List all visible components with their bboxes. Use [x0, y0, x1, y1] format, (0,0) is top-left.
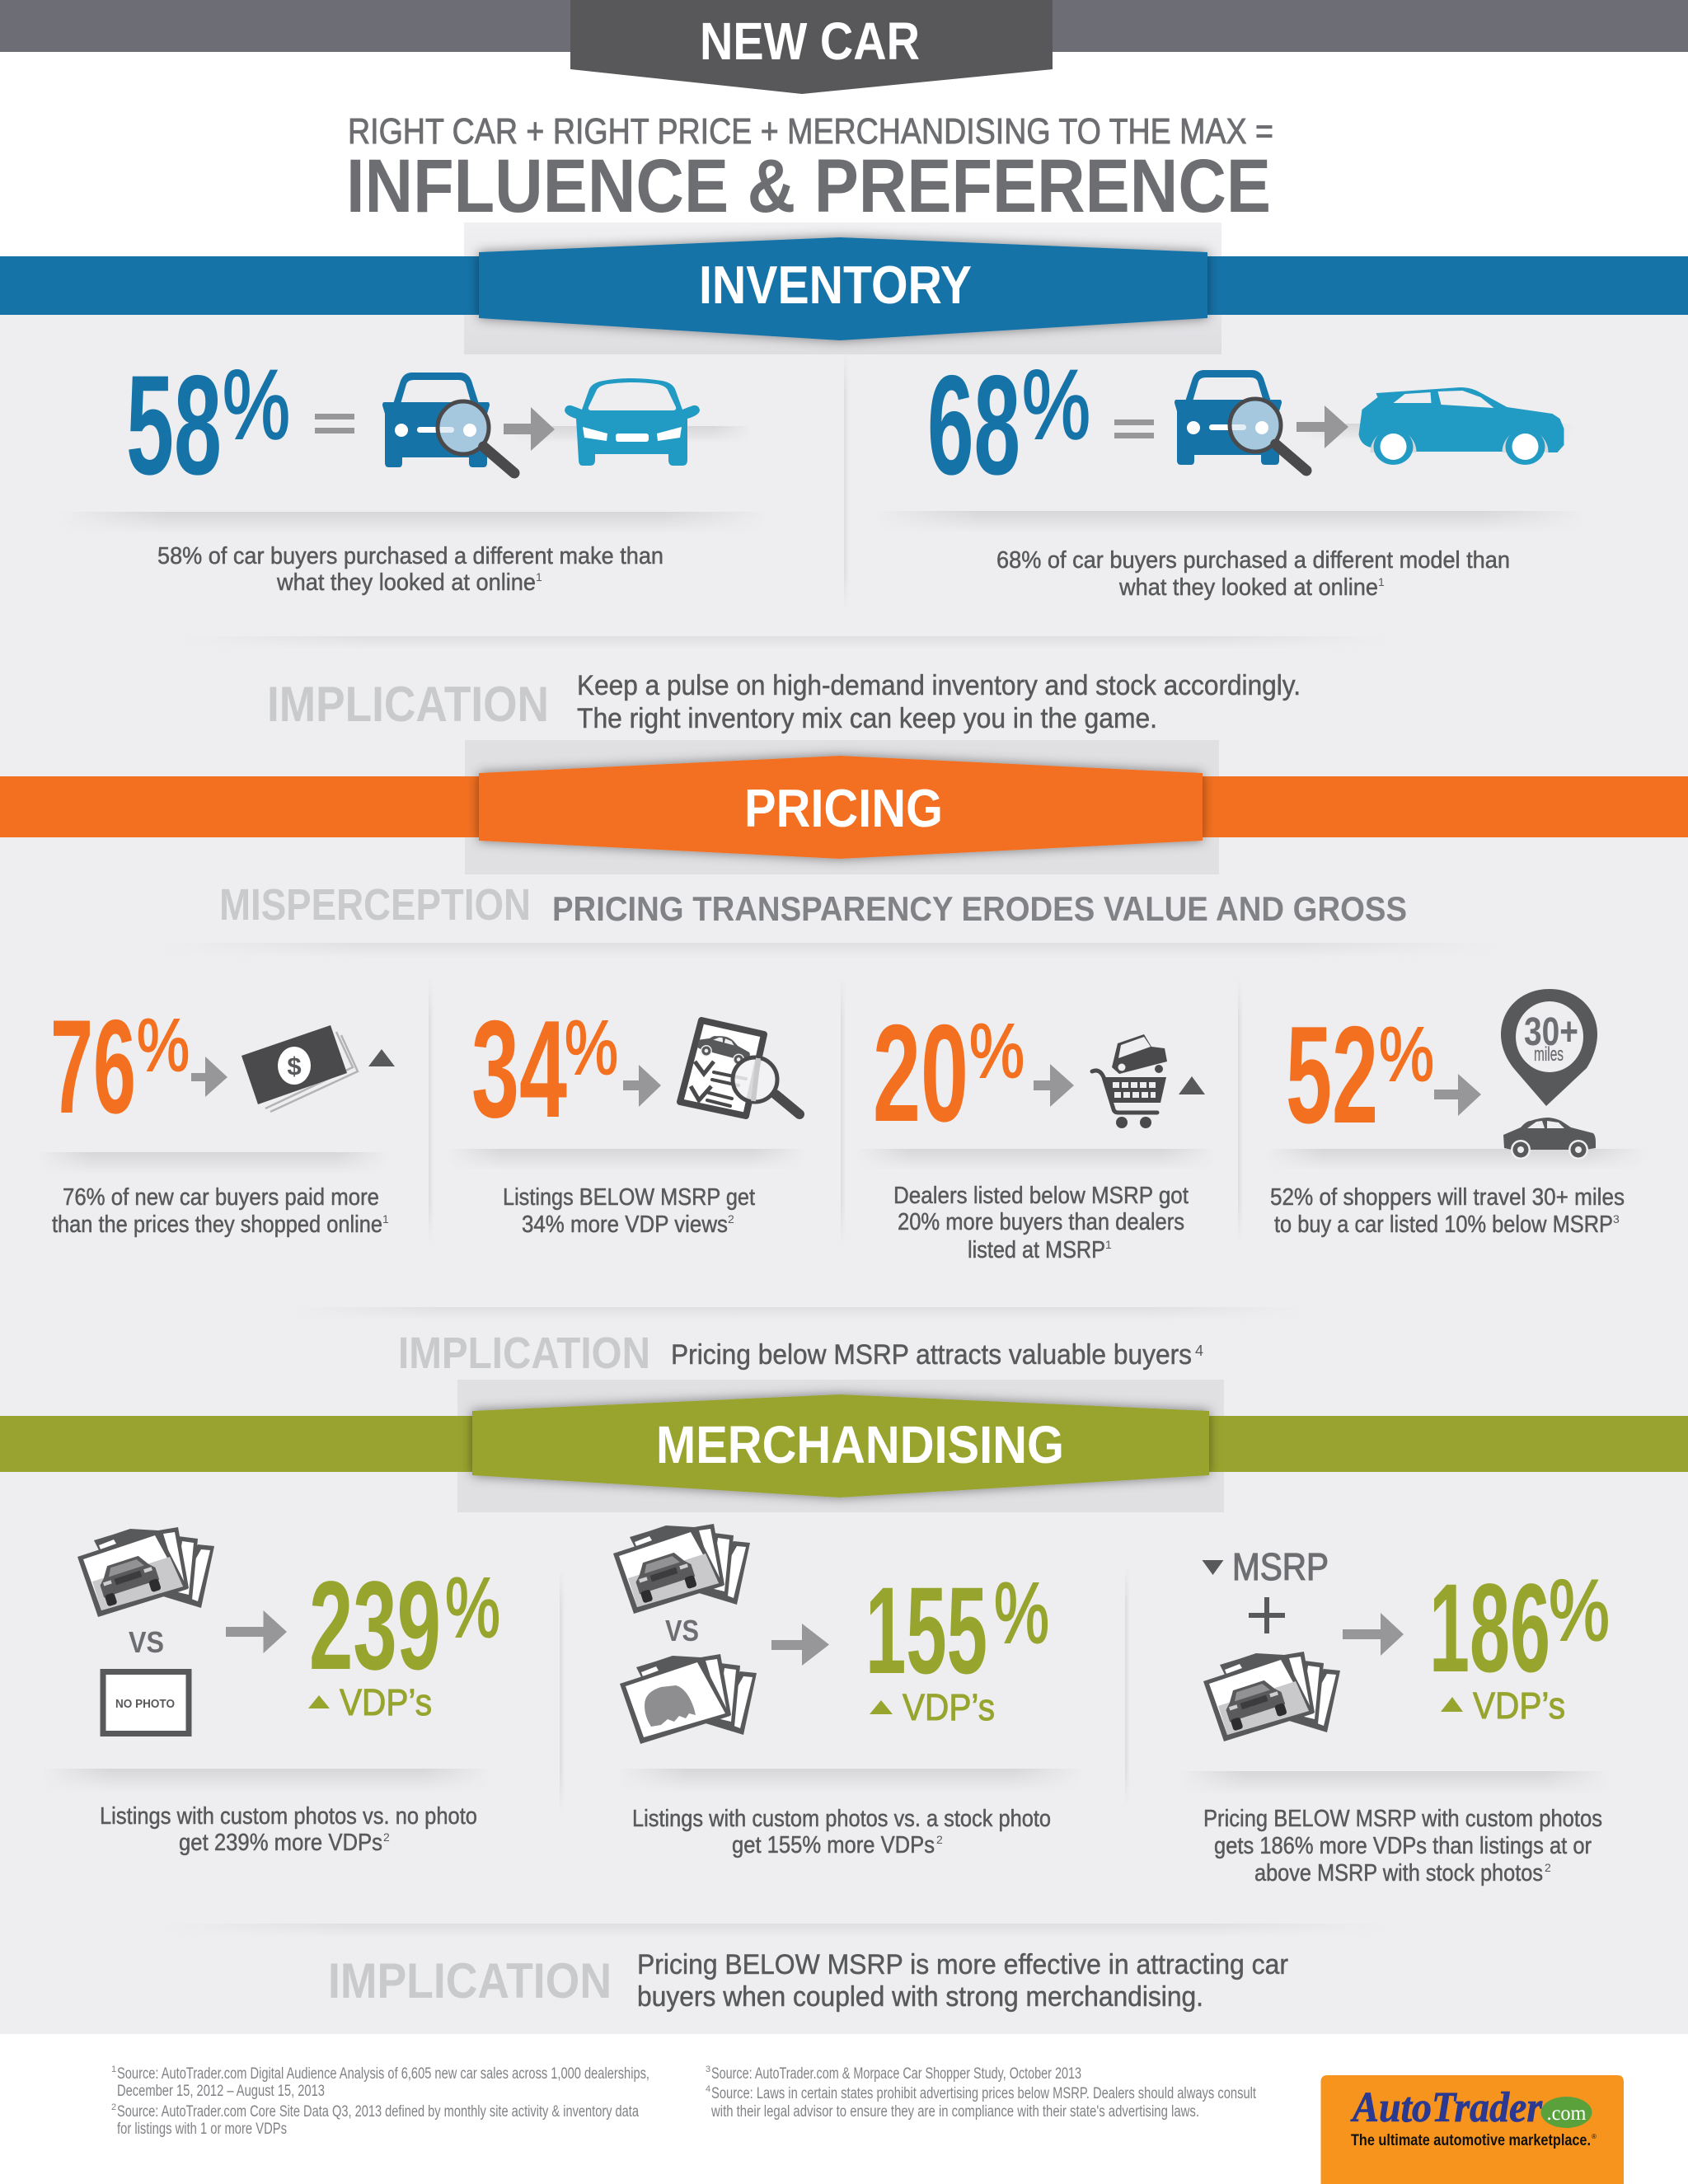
caption: 68 percent: 68% of car buyers purchased a different model than	[996, 547, 1510, 574]
pricing band	[0, 740, 1688, 874]
caption: 52 percent: to buy a car listed 10% below MSRP	[1274, 1212, 1613, 1238]
caption: 52 percent: 3	[1613, 1212, 1620, 1226]
caption: 34 percent: Listings BELOW MSRP get	[503, 1184, 755, 1211]
caption: 155 percent: Listings with custom photos vs. a stock photo	[632, 1806, 1051, 1832]
stat: 76 percent: %	[137, 1005, 190, 1087]
inventory heading: INVENTORY	[699, 255, 972, 315]
stat: 68 percent: 68	[927, 346, 1020, 504]
panel: merchandising	[0, 1380, 1688, 2013]
icon: shopping cart with car	[1092, 1034, 1205, 1128]
implication: inventory	[267, 670, 1301, 734]
stat: 76 percent: 76	[50, 992, 136, 1141]
implication: merchandising: Pricing BELOW MSRP is more effective in attracting car	[637, 1949, 1288, 1980]
caption: 155 percent: 2	[936, 1833, 943, 1846]
caption: 186 percent: 2	[1545, 1861, 1551, 1874]
arrow	[504, 407, 555, 451]
caption: 239 percent: get 239% more VDPs	[179, 1830, 382, 1856]
plus sign	[1249, 1597, 1285, 1633]
icon: checklist with magnifier	[680, 1020, 799, 1116]
caption: 20 percent	[893, 1183, 1189, 1263]
stat: 186 percent: %	[1549, 1563, 1610, 1659]
caption: 20 percent: 1	[1105, 1238, 1112, 1251]
footnotes: right: Source: AutoTrader.com & Morpace Car Shopper Study, October 2013	[711, 2065, 1081, 2083]
arrow	[1034, 1064, 1074, 1107]
caption: 34 percent: 34% more VDP views	[522, 1212, 728, 1238]
vs label: VS	[665, 1614, 699, 1647]
implication: inventory: Keep a pulse on high-demand inventory and stock accordingly.	[577, 670, 1301, 701]
stat: 20 percent: %	[969, 1008, 1025, 1094]
implication: merchandising: IMPLICATION	[328, 1953, 612, 2008]
stat: 58 percent: 58	[126, 346, 222, 504]
implication: pricing: Pricing below MSRP attracts valuable buyers	[671, 1339, 1192, 1371]
logo: autotrader: AutoTrader	[1350, 2084, 1543, 2131]
caption: 239 percent: Listings with custom photos vs. no photo	[100, 1803, 477, 1830]
arrow	[1296, 405, 1348, 448]
caption: 76 percent: than the prices they shopped online	[52, 1212, 382, 1238]
badge: new car	[570, 0, 1053, 94]
icon: equals	[315, 414, 354, 434]
caption: 52 percent: 52% of shoppers will travel 30+ miles	[1270, 1184, 1625, 1211]
logo: autotrader: The ultimate automotive marketplace.	[1351, 2132, 1591, 2149]
arrow	[623, 1065, 661, 1107]
caption: 155 percent	[632, 1806, 1051, 1858]
caption: 186 percent: Pricing BELOW MSRP with custom photos	[1203, 1806, 1602, 1832]
stat: 68 percent: %	[1022, 350, 1090, 460]
icon: small car	[1503, 1118, 1596, 1160]
caption: 20 percent: 20% more buyers than dealers	[898, 1209, 1184, 1235]
stat: 239 percent: %	[445, 1560, 500, 1655]
misperception line	[219, 880, 1407, 930]
stat: 52 percent: 52	[1286, 997, 1378, 1152]
implication: merchandising: buyers when coupled with strong merchandising.	[637, 1981, 1203, 2013]
label: below msrp: MSRP	[1232, 1545, 1329, 1588]
icon: different model suv	[1358, 387, 1564, 465]
arrow	[226, 1610, 287, 1653]
caption: 52 percent	[1270, 1184, 1625, 1238]
caption: 186 percent	[1203, 1806, 1602, 1886]
caption: 239 percent	[100, 1803, 477, 1856]
caption: 186 percent: above MSRP with stock photos	[1254, 1860, 1543, 1886]
footnotes: right: 4	[706, 2084, 710, 2094]
label: up triangle vdps: VDP’s	[340, 1681, 432, 1723]
caption: 58 percent	[157, 543, 663, 596]
footnotes: left: December 15, 2012 – August 15, 2013	[117, 2083, 325, 2100]
icon: no photo box	[103, 1671, 189, 1734]
pricing heading: PRICING	[744, 778, 943, 838]
stat: 52 percent: %	[1379, 1011, 1434, 1097]
arrow	[1343, 1613, 1404, 1656]
caption: 58 percent: 58% of car buyers purchased a different make than	[157, 543, 663, 569]
arrow	[1434, 1074, 1481, 1116]
implication: merchandising	[328, 1949, 1288, 2013]
implication: pricing: 4	[1195, 1343, 1203, 1359]
header band	[0, 0, 1688, 94]
icon: cash stack with up triangle	[241, 1025, 395, 1112]
icon: car with magnifier	[382, 373, 514, 473]
badge label: NEW CAR	[700, 12, 920, 71]
icon: different make car	[565, 378, 700, 466]
footnotes: right: Source: Laws in certain states prohibit advertising prices below MSRP. Dealers should always consult	[711, 2085, 1257, 2102]
icon: custom photos	[613, 1524, 750, 1614]
implication: pricing: IMPLICATION	[398, 1329, 650, 1378]
inventory band	[0, 223, 1688, 354]
arrow	[771, 1624, 829, 1666]
icon: 30+ miles location pin	[1501, 989, 1597, 1106]
caption: 58 percent: what they looked at online	[276, 569, 536, 596]
stat: 155 percent: %	[994, 1566, 1049, 1661]
caption: 58 percent: 1	[536, 570, 542, 583]
implication: inventory: IMPLICATION	[267, 677, 549, 732]
footnotes: left: 1	[111, 2064, 116, 2074]
stat: 34 percent: %	[565, 1005, 618, 1090]
footnotes: left: Source: AutoTrader.com Digital Audience Analysis of 6,605 new car sales across 1,000 dealerships,	[117, 2065, 649, 2083]
label: up triangle vdps	[870, 1686, 995, 1728]
title: INFLUENCE & PREFERENCE	[346, 144, 1271, 228]
footnotes: left	[111, 2064, 649, 2138]
implication: pricing	[398, 1329, 1203, 1378]
panel: inventory	[0, 223, 1688, 734]
implication: inventory: The right inventory mix can keep you in the game.	[577, 703, 1157, 734]
caption: 155 percent: get 155% more VDPs	[732, 1832, 935, 1858]
caption: 68 percent: what they looked at online	[1118, 574, 1378, 601]
icon: cash stack with up triangle: $	[287, 1052, 302, 1080]
caption: 76 percent	[52, 1184, 389, 1238]
caption: 20 percent: Dealers listed below MSRP got	[893, 1183, 1189, 1209]
vs label: VS	[129, 1625, 164, 1659]
stat: 20 percent: 20	[873, 996, 968, 1151]
caption: 34 percent	[503, 1184, 755, 1238]
caption: 68 percent: 1	[1378, 575, 1385, 588]
logo: autotrader	[1320, 2075, 1624, 2184]
footnotes: right: with their legal advisor to ensure they are in compliance with their state's advertising laws.	[710, 2103, 1199, 2121]
misperception line: PRICING TRANSPARENCY ERODES VALUE AND GROSS	[552, 889, 1407, 928]
caption: 76 percent: 76% of new car buyers paid more	[63, 1184, 379, 1211]
footnotes: left: Source: AutoTrader.com Core Site Data Q3, 2013 defined by monthly site activity & inventory data	[117, 2103, 639, 2121]
stat: 34 percent: 34	[471, 991, 567, 1146]
footnotes: right: 3	[706, 2064, 710, 2074]
icon: 30+ miles location pin: miles	[1534, 1043, 1564, 1066]
caption: 186 percent: gets 186% more VDPs than listings at or	[1214, 1833, 1592, 1859]
footnotes: left: for listings with 1 or more VDPs	[117, 2121, 287, 2138]
caption: 239 percent: 2	[383, 1830, 390, 1844]
subtitle: RIGHT CAR + RIGHT PRICE + MERCHANDISING TO THE MAX =	[348, 111, 1273, 152]
label: up triangle vdps	[308, 1681, 432, 1723]
footnotes: right	[706, 2064, 1257, 2121]
icon: equals	[1114, 419, 1154, 438]
icon: stock photos	[620, 1654, 757, 1744]
caption: 68 percent	[996, 547, 1510, 601]
label: up triangle vdps: VDP’s	[903, 1686, 995, 1728]
panel: pricing	[0, 740, 1688, 1378]
stat: 186 percent: 186	[1429, 1558, 1550, 1699]
stat: 155 percent: 155	[865, 1561, 987, 1699]
icon: custom photos	[77, 1527, 214, 1617]
merchandising heading: MERCHANDISING	[656, 1415, 1064, 1474]
logo: autotrader: .com	[1546, 2102, 1587, 2125]
icon: no photo box: NO PHOTO	[115, 1698, 175, 1711]
icon: 30+ miles location pin: 30+	[1524, 1010, 1578, 1054]
arrow	[191, 1057, 227, 1097]
icon: car with magnifier	[1175, 370, 1306, 471]
stat: 58 percent: %	[223, 350, 290, 460]
label: up triangle vdps	[1441, 1685, 1565, 1727]
merchandising band	[0, 1380, 1688, 1512]
stat: 239 percent: 239	[309, 1555, 441, 1696]
label: up triangle vdps: VDP’s	[1473, 1685, 1565, 1727]
footnotes: left: 2	[111, 2102, 116, 2112]
caption: 34 percent: 2	[728, 1212, 734, 1226]
icon: custom photos	[1203, 1652, 1340, 1741]
misperception line: MISPERCEPTION	[219, 880, 531, 930]
label: below msrp	[1202, 1545, 1329, 1588]
caption: 20 percent: listed at MSRP	[968, 1237, 1105, 1263]
caption: 76 percent: 1	[382, 1212, 389, 1226]
logo: autotrader: ®	[1592, 2133, 1597, 2140]
